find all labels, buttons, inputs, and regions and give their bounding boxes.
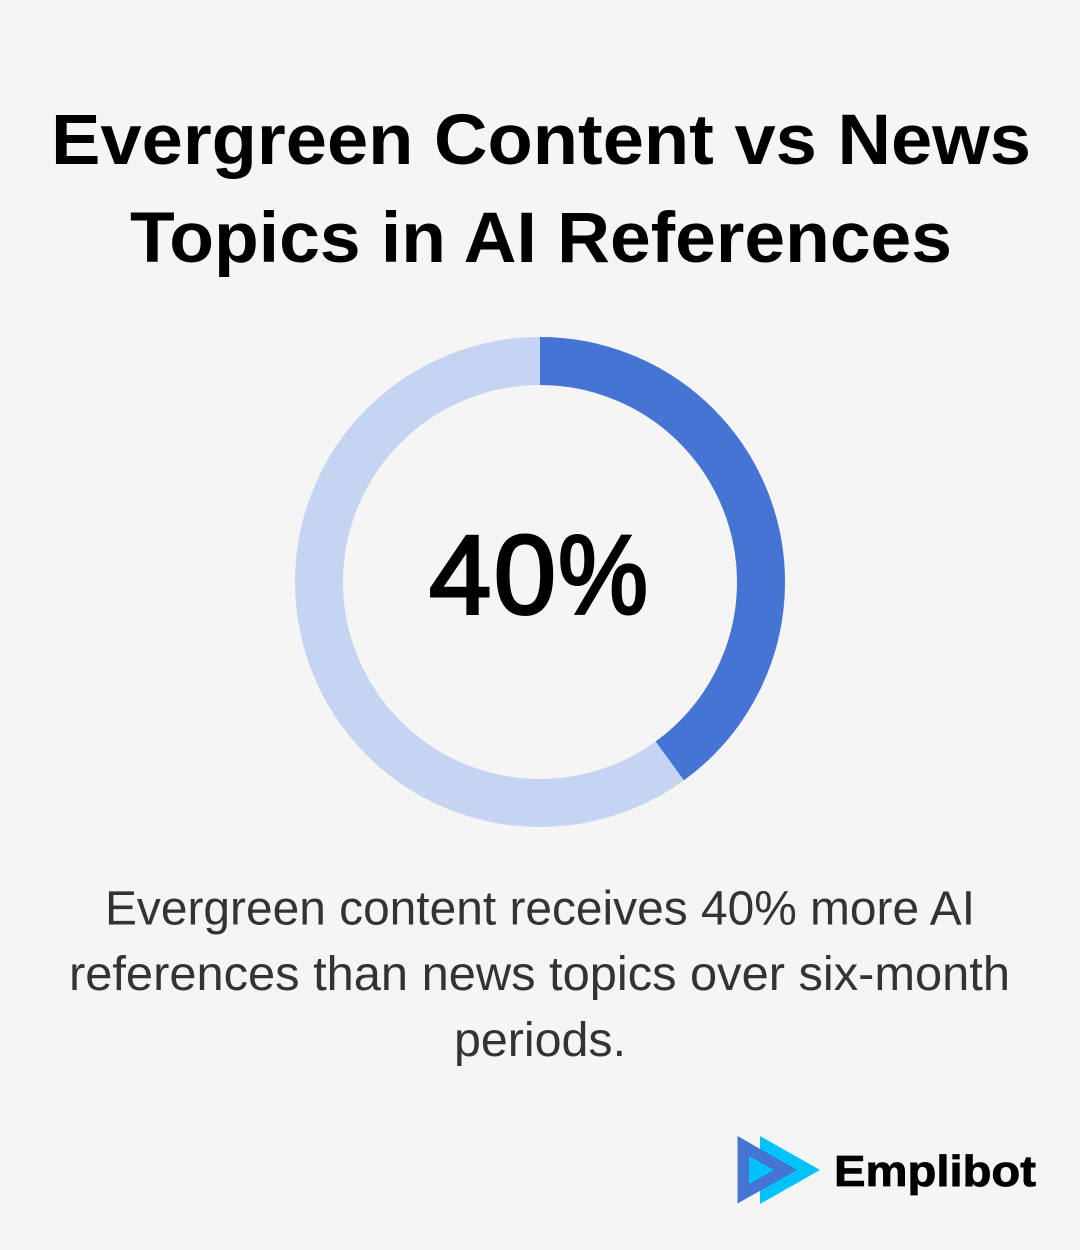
description text (69, 882, 1010, 1067)
donut value: % (558, 512, 648, 638)
description text: Evergreen content receives 40% more AI (105, 882, 975, 936)
logo: Emplibot (738, 1136, 1036, 1204)
donut value: 4 (429, 512, 491, 638)
donut chart: 40% (319, 361, 761, 803)
description text: periods. (454, 1014, 626, 1067)
icon: play triangles (738, 1136, 820, 1204)
title: Evergreen Content vs News (51, 101, 1031, 180)
logo wordmark: Emplibot (834, 1147, 1036, 1196)
donut value: 0 (494, 512, 556, 638)
title (51, 101, 1031, 278)
title: Topics in AI References (130, 199, 952, 278)
description text: references than news topics over six-month (69, 948, 1010, 1001)
